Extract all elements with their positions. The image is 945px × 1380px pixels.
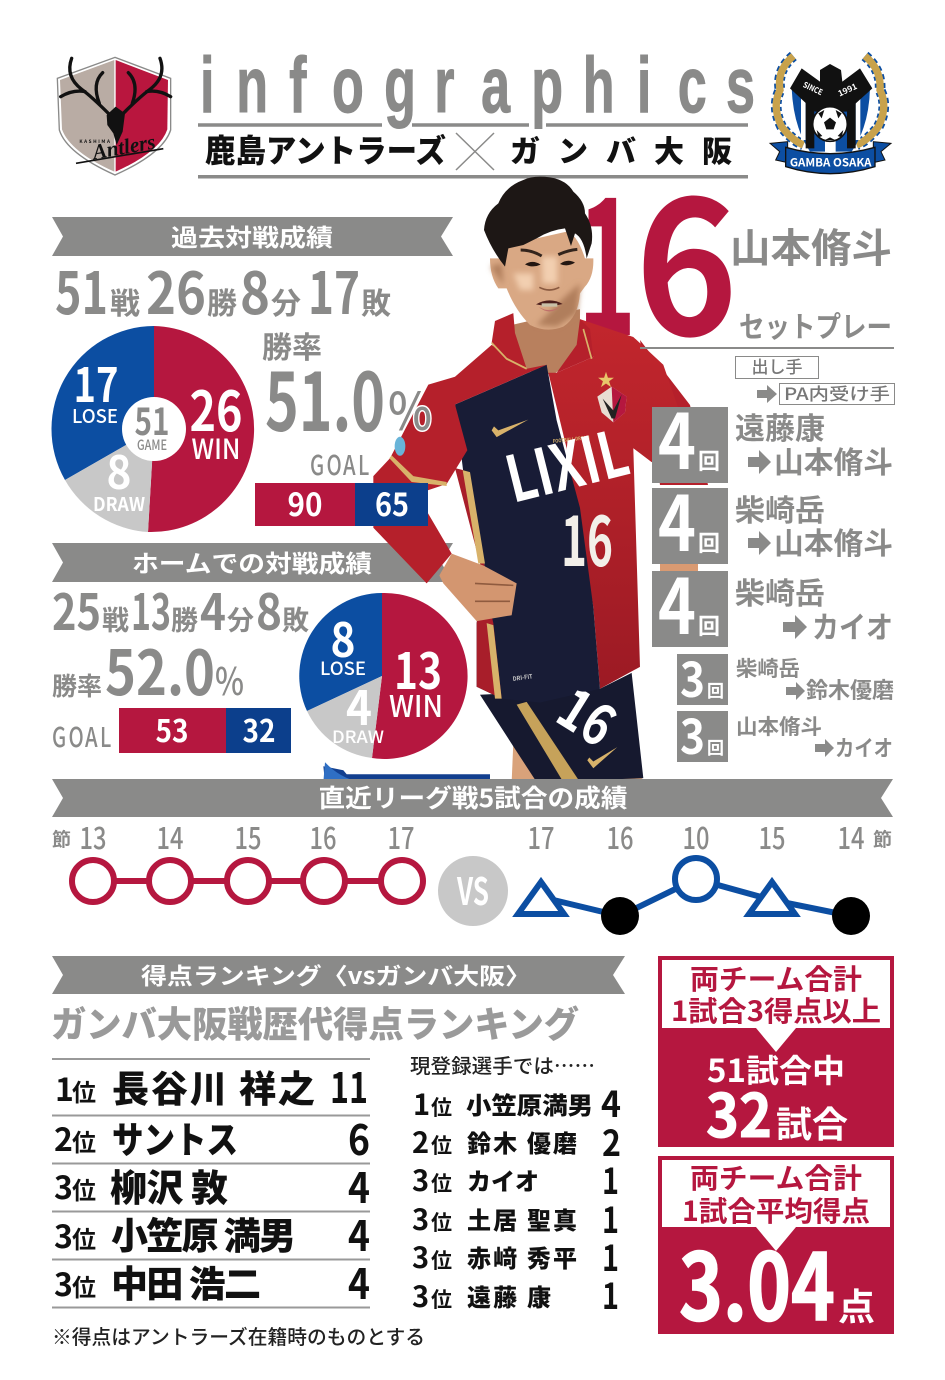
sponsor text: LIXIL [495, 402, 637, 521]
chart: Kashima last five matches: 15 [234, 814, 262, 858]
text: 25 games 13 wins 4 draws 8 losses: 8 [256, 573, 282, 645]
ribbon heading: last five league matches: 直近リーグ戦5試合の成績 [318, 779, 628, 815]
row 4: 3 [54, 1212, 73, 1258]
text: 25 games 13 wins 4 draws 8 losses: 分 [227, 599, 254, 638]
text: 51 games 26 wins 8 draws 17 losses: 分 [271, 279, 301, 323]
callout: average goals per match: 3.04 [679, 1214, 835, 1347]
table: current squad scorers: 3 [412, 1235, 429, 1277]
pie chart: overall record: GAME [137, 435, 167, 455]
text: 51 games 26 wins 8 draws 17 losses: 勝 [207, 279, 237, 323]
table: current squad scorers: 位 [431, 1207, 452, 1237]
bar chart: overall goals: 90 [288, 480, 322, 526]
text: player name: 山本脩斗 [730, 216, 892, 274]
leg [512, 742, 537, 782]
callout: matches with 3+ goals: 32 [706, 1068, 772, 1155]
legend: provider to receiver: 出し手 [752, 353, 802, 378]
sleeve patch [395, 437, 405, 456]
row 2: サントス [112, 1110, 238, 1164]
text: current players caption: 現登録選手では…… [410, 1050, 595, 1079]
neck [512, 309, 580, 375]
bar chart: home goals [119, 706, 291, 753]
row 2: 2 [54, 1115, 73, 1161]
row 5: 位 [72, 1268, 96, 1303]
pie chart: overall record: 17 [74, 347, 118, 416]
callout: matches with 3+ goals: 試合 [776, 1096, 848, 1148]
table: current squad scorers: 位 [431, 1245, 452, 1275]
fabric tag: DRI-FIT [512, 671, 533, 683]
table: current squad scorers: 位 [431, 1092, 452, 1122]
torso navy [455, 365, 600, 703]
pie chart: overall record: LOSE [72, 402, 118, 429]
pie chart: home record: LOSE [320, 655, 366, 681]
text: 51 games 26 wins 8 draws 17 losses: 17 [308, 247, 360, 331]
row 1: 長谷川 祥之 [112, 1059, 315, 1113]
callout: matches with 3+ goals: 51試合中 [707, 1046, 845, 1092]
chart: Gamba last five matches: 17 [528, 814, 554, 858]
table: current squad scorers: 1 [602, 1192, 619, 1244]
set-play row: Shibasaki to Yamamoto 4 times: 山本脩斗 [774, 519, 893, 563]
text: 25 games 13 wins 4 draws 8 losses: 13 [131, 573, 171, 645]
title: infographics: infographics [200, 41, 755, 130]
icon: Gamba Osaka crest: SINCE [801, 79, 825, 98]
table: current squad scorers: 赤﨑 秀平 [467, 1239, 577, 1274]
shoe and trailing leg [323, 766, 490, 782]
set-play row: Shibasaki to Yamamoto 4 times: 回 [698, 526, 720, 558]
text: win rate label: 勝率 [262, 323, 322, 367]
callout: average goals per match: 両チーム合計 [690, 1157, 862, 1197]
row 4: 4 [348, 1203, 370, 1264]
ribbon heading: past record: 過去対戦成績 [171, 218, 333, 253]
table: current squad scorers: カイオ [467, 1162, 539, 1197]
row 3: 位 [72, 1171, 96, 1206]
text: 25 games 13 wins 4 draws 8 losses: 勝 [171, 599, 198, 638]
table: current squad scorers: 1 [602, 1268, 619, 1320]
row 5: 中田 浩二 [111, 1254, 261, 1308]
callout: matches with 3+ goals [658, 956, 894, 1155]
icon: versus cross [456, 133, 494, 170]
pie chart: overall record: WIN [192, 428, 240, 468]
ribbon heading: scoring ranking [52, 956, 625, 994]
pie chart: overall record: DRAW [93, 490, 145, 517]
title rule: upper [198, 123, 748, 127]
chart: Kashima last five matches: 16 [310, 814, 336, 858]
chart: Gamba last five matches: 14 [838, 814, 864, 858]
face highlights [513, 257, 557, 290]
row 5: 3 [54, 1260, 73, 1306]
set-play row: Shibasaki to Caio 4 times: 回 [698, 609, 720, 641]
hand [439, 554, 517, 621]
shirt number: 16 [561, 487, 613, 586]
text: home goal label: GOAL [52, 715, 111, 755]
callout: average goals per match: 点 [838, 1277, 875, 1331]
sponsor tag: FOOTBALL DREAM [552, 434, 590, 445]
callout: matches with 3+ goals: 1試合3得点以上 [671, 990, 881, 1030]
chart: Gamba last five matches: 10 [682, 814, 710, 858]
text: 25 games 13 wins 4 draws 8 losses: 25 [52, 573, 101, 645]
pie chart: overall record: 8 [106, 437, 132, 503]
shorts [480, 673, 643, 782]
table: current squad scorers: 4 [601, 1076, 621, 1128]
text: 25 games 13 wins 4 draws 8 losses: 戦 [102, 599, 129, 638]
pie chart: home record: 13 [394, 632, 442, 704]
arm and sleeve behind boxes [640, 340, 708, 485]
left sleeve and forearm [373, 345, 547, 583]
mouth [536, 300, 563, 306]
text: 51 games 26 wins 8 draws 17 losses: 26 [146, 247, 206, 331]
table: current squad scorers: 位 [431, 1168, 452, 1198]
text: 25 games 13 wins 4 draws 8 losses: 敗 [282, 599, 309, 638]
icon: Kashima Antlers crest: Antlers [89, 130, 157, 165]
big uniform number 16 [578, 121, 738, 389]
text: 25 games 13 wins 4 draws 8 losses: 4 [200, 573, 226, 645]
table: current squad scorers: 3 [412, 1274, 429, 1316]
pie chart: home record: 8 [330, 602, 356, 671]
table: current squad scorers: 2 [602, 1115, 621, 1167]
crest on jersey [597, 387, 627, 422]
set-play row: Shibasaki to Suzuki 3 times: 柴崎岳 [736, 653, 800, 683]
torso red [548, 319, 680, 689]
pie chart: home record [299, 593, 468, 759]
set-play row: Shibasaki to Caio 4 times: 4 [658, 546, 696, 656]
set-play row: Yamamoto to Caio 3 times: 3 [680, 698, 705, 768]
ribbon heading: home record [52, 543, 453, 582]
panel: home record [52, 573, 468, 759]
footnote: ※得点はアントラーズ在籍時のものとする [52, 1321, 425, 1350]
head [484, 177, 593, 330]
face [490, 232, 593, 330]
set-play row: Shibasaki to Yamamoto 4 times: 柴崎岳 [735, 486, 825, 530]
set-play row: Shibasaki to Caio 4 times: カイオ [812, 603, 893, 647]
big uniform number 16: 6 [635, 121, 738, 389]
set-play row: Shibasaki to Suzuki 3 times: 3 [680, 641, 705, 711]
row 4: 小笠原 満男 [111, 1206, 296, 1260]
set-play row: Endo to Yamamoto 4 times: 4 [658, 381, 696, 491]
icon: Kashima Antlers crest: KASHIMA [79, 139, 110, 145]
panel: head-to-head record [51, 217, 453, 532]
text: 51 games 26 wins 8 draws 17 losses [55, 247, 391, 331]
title rule: lower [198, 175, 748, 178]
pie chart: overall record [51, 326, 254, 532]
table: current squad scorers: 3 [412, 1197, 429, 1239]
text: goal label: GOAL [310, 443, 369, 483]
text: 25 games 13 wins 4 draws 8 losses [52, 573, 309, 645]
table: current squad scorers: 位 [431, 1130, 452, 1160]
ribbon heading: past record [52, 217, 453, 256]
row 3: 3 [54, 1163, 73, 1209]
legend: provider to receiver [736, 353, 894, 405]
heading: Gamba Osaka: ガンバ大阪 [510, 127, 732, 171]
set-play row: Shibasaki to Suzuki 3 times [677, 641, 894, 711]
table: current squad scorers [410, 1050, 621, 1320]
text: 51 games 26 wins 8 draws 17 losses: 戦 [110, 279, 140, 323]
set-play row: Yamamoto to Caio 3 times: 山本脩斗 [736, 711, 822, 741]
table: current squad scorers: 1 [602, 1153, 619, 1205]
chart: Gamba last five matches [518, 814, 892, 935]
big uniform number 16: 1 [578, 121, 636, 389]
shorts number: 16 [544, 666, 633, 763]
callout: matches with 3+ goals: 両チーム合計 [690, 958, 862, 998]
hair [484, 177, 592, 267]
text: 51 games 26 wins 8 draws 17 losses: 8 [240, 247, 270, 331]
ribbon heading: home record: ホームでの対戦成績 [132, 544, 372, 579]
row 3: 柳沢 敦 [110, 1158, 228, 1212]
callout: average goals per match [658, 1156, 894, 1347]
row 2 [54, 1107, 370, 1168]
text: home win rate [52, 623, 244, 713]
table: current squad scorers: 小笠原満男 [466, 1086, 593, 1121]
chart: Gamba last five matches: 節 [873, 825, 892, 852]
icon: Gamba Osaka crest: 1991 [836, 81, 859, 99]
bar chart: home goals: 32 [242, 706, 276, 751]
row 1: 11 [330, 1055, 368, 1116]
pie chart: home record: 4 [346, 670, 372, 739]
set-play row: Yamamoto to Caio 3 times: カイオ [835, 731, 893, 763]
divider under set play [640, 347, 894, 349]
table: current squad scorers: 鈴木 優磨 [467, 1124, 577, 1159]
set-play row: Endo to Yamamoto 4 times: 山本脩斗 [774, 438, 893, 482]
table: current squad scorers: 3 [412, 1158, 429, 1200]
set-play row: Endo to Yamamoto 4 times: 遠藤康 [735, 404, 825, 448]
icon: Gamba Osaka crest: GAMBA OSAKA [790, 155, 872, 171]
set-play row: Shibasaki to Caio 4 times [652, 546, 893, 656]
chart: Kashima last five matches: 節 [52, 825, 71, 852]
set-play row: Yamamoto to Caio 3 times: 回 [707, 734, 724, 759]
row 3: 4 [348, 1155, 370, 1216]
callout: average goals per match: 1試合平均得点 [682, 1190, 870, 1230]
bar chart: overall goals: 65 [375, 480, 409, 526]
row 1 [55, 1055, 368, 1116]
table: all-time scorers [52, 1055, 370, 1312]
row 2: 位 [72, 1123, 96, 1158]
set-play row: Shibasaki to Yamamoto 4 times [652, 463, 893, 573]
row 3 [54, 1155, 370, 1216]
table: current squad scorers: 1 [413, 1082, 430, 1124]
chart: Kashima last five matches: 13 [80, 814, 106, 858]
row 2: 6 [348, 1107, 370, 1168]
icon: VS badge [438, 856, 508, 926]
panel: player photo [323, 177, 708, 782]
table: current squad scorers: 位 [431, 1284, 452, 1314]
chart: Kashima last five matches [52, 814, 423, 902]
pie chart: overall record: 26 [190, 367, 242, 447]
table: current squad scorers: 土居 聖真 [467, 1201, 577, 1236]
table: current squad scorers: 1 [602, 1230, 619, 1282]
pie chart: home record: DRAW [332, 723, 384, 748]
icon: VS badge: VS [456, 861, 489, 916]
pie chart: home record: WIN [389, 682, 443, 726]
pie chart: overall record: 51 [134, 392, 170, 446]
table: current squad scorers: 遠藤 康 [467, 1278, 551, 1313]
set-play row: Endo to Yamamoto 4 times [652, 381, 893, 491]
chart: Kashima last five matches: 17 [388, 814, 414, 858]
row 1: 1 [55, 1065, 74, 1111]
row 4: 位 [72, 1220, 96, 1255]
star: ★ [598, 366, 614, 391]
chart: Gamba last five matches: 16 [606, 814, 634, 858]
eyes [525, 261, 575, 266]
nose [539, 287, 559, 290]
set-play row: Shibasaki to Caio 4 times: 柴崎岳 [735, 569, 825, 613]
heading: Kashima Antlers: 鹿島アントラーズ [205, 126, 446, 172]
text: 51 games 26 wins 8 draws 17 losses: 51 [55, 247, 108, 331]
row 1: 位 [72, 1073, 96, 1108]
icon: Gamba Osaka crest [770, 56, 891, 174]
chart: Gamba last five matches: 15 [758, 814, 786, 858]
text: win rate 51.0: 51.0 [265, 339, 385, 455]
set-play row: Endo to Yamamoto 4 times: 回 [698, 444, 720, 476]
table: current squad scorers: 2 [412, 1120, 429, 1162]
swoosh [492, 420, 528, 437]
row 5: 4 [348, 1251, 370, 1312]
text: 51 games 26 wins 8 draws 17 losses: 敗 [361, 279, 391, 323]
set-play row: Shibasaki to Suzuki 3 times: 鈴木優磨 [806, 673, 894, 705]
text: set play: セットプレー [739, 304, 892, 346]
face shadow [491, 263, 580, 327]
text: home win rate: 52.0 [105, 623, 215, 713]
collar [492, 313, 527, 369]
eyebrows [521, 249, 577, 256]
chart: Kashima last five matches: 14 [156, 814, 184, 858]
set-play row: Yamamoto to Caio 3 times [677, 698, 893, 768]
heading: all-time ranking against Gamba: ガンバ大阪戦歴代得点ランキング [51, 996, 579, 1048]
set-play row: Shibasaki to Suzuki 3 times: 回 [707, 677, 724, 702]
row 4 [54, 1203, 370, 1264]
bar chart: overall goals [255, 480, 428, 526]
ribbon heading: last five league matches [52, 779, 893, 817]
torso left red side [455, 468, 502, 699]
text: home win rate: 勝率 [52, 667, 102, 703]
row 5 [54, 1251, 370, 1312]
ribbon heading: scoring ranking: 得点ランキング〈vsガンバ大阪〉 [141, 957, 531, 991]
icon: Kashima Antlers crest [57, 57, 171, 175]
text: home win rate: % [215, 651, 244, 706]
legend: provider to receiver: PA内受け手 [784, 380, 890, 405]
bar chart: home goals: 53 [156, 706, 188, 751]
set-play row: Shibasaki to Yamamoto 4 times: 4 [658, 463, 696, 573]
text: win rate percent sign: % [388, 370, 432, 445]
